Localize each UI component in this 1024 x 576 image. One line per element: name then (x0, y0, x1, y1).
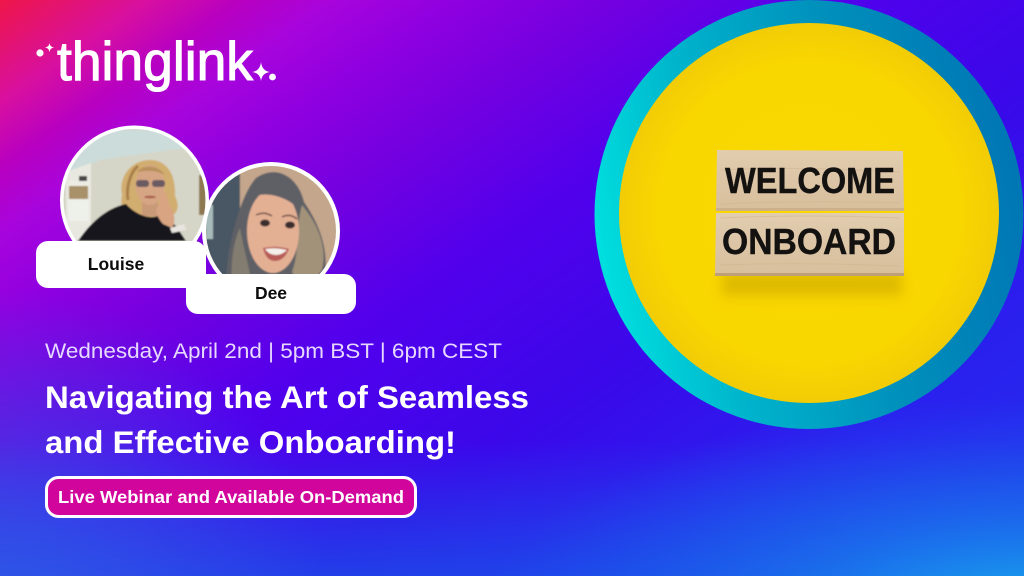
logo wordmark: thinglink (57, 30, 253, 92)
logo: thinglink (36, 30, 276, 92)
date and time line: Wednesday, April 2nd | 5pm BST | 6pm CEST (45, 340, 502, 363)
wooden block: WELCOME: WELCOME (725, 160, 895, 201)
pill: format (46, 478, 416, 516)
title line 2: and Effective Onboarding! (45, 424, 456, 460)
speaker portrait: Dee (202, 162, 340, 274)
name label: Dee: Dee (255, 283, 287, 303)
name label: Dee (186, 274, 356, 314)
name label: Louise (36, 241, 206, 288)
wooden block: WELCOME (716, 150, 904, 211)
teal ring circle (594, 0, 1024, 429)
name label: Louise: Louise (88, 254, 144, 274)
speaker portrait: Louise (60, 126, 209, 242)
yellow circle photo (619, 23, 999, 403)
title (45, 379, 529, 460)
pill: format: Live Webinar and Available On-Demand (58, 487, 404, 507)
wooden block: ONBOARD: ONBOARD (722, 221, 896, 262)
logo sparkle right (252, 62, 276, 81)
logo sparkle left (36, 43, 54, 57)
block shadow (722, 272, 902, 296)
title line 1: Navigating the Art of Seamless (45, 379, 529, 415)
wooden block: ONBOARD (715, 213, 904, 276)
